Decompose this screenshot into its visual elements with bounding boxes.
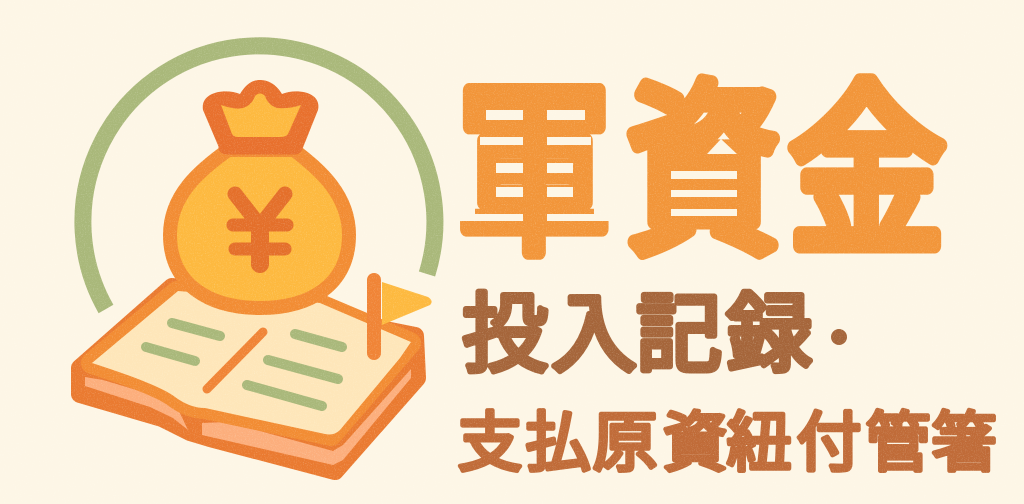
left page edge: [85, 377, 188, 430]
subtitle: 支払原資紐付管箸: [457, 406, 997, 479]
title: 軍資金: [455, 69, 946, 277]
subtitle: 支払原資紐付管箸: 払: [525, 406, 591, 479]
icon: green arc: [83, 46, 435, 309]
bag knot inner: [221, 94, 301, 137]
icon: money bag: [170, 80, 349, 308]
subtitle: 支払原資紐付管箸: 箸: [931, 406, 997, 479]
yen symbol: [233, 194, 287, 264]
book page rim: [92, 292, 410, 435]
subtitle: 投入記録・: 入: [551, 287, 637, 383]
subtitle: 投入記録・: 録: [726, 287, 812, 383]
subtitle: 投入記録・: 投: [462, 287, 548, 383]
flag cloth: [382, 282, 432, 325]
title: 軍資金: 資: [626, 70, 780, 277]
book cover: [80, 287, 417, 471]
green text lines: [146, 323, 342, 406]
subtitle: 支払原資紐付管箸: 付: [796, 406, 862, 479]
subtitle: 支払原資紐付管箸: 支: [457, 406, 523, 479]
subtitle: 投入記録・: 記: [636, 287, 722, 383]
bag knot outer: [203, 80, 318, 150]
book page: [92, 291, 411, 434]
subtitle: 支払原資紐付管箸: 紐: [726, 406, 792, 479]
subtitle: 支払原資紐付管箸: 管: [865, 406, 931, 479]
icon: open ledger book: [80, 287, 417, 471]
subtitle: 支払原資紐付管箸: 資: [662, 406, 728, 479]
flag pole: [367, 280, 381, 353]
right page edge: [202, 369, 411, 465]
bag body: [170, 150, 349, 308]
title: 軍資金: 軍: [457, 70, 611, 277]
subtitle: 支払原資紐付管箸: 原: [592, 406, 658, 479]
bag neck band: [226, 140, 295, 154]
title: 軍資金: 金: [788, 69, 946, 277]
book spine: [207, 332, 263, 389]
subtitle: 投入記録・: [462, 287, 847, 383]
icon: flag: [374, 280, 432, 353]
